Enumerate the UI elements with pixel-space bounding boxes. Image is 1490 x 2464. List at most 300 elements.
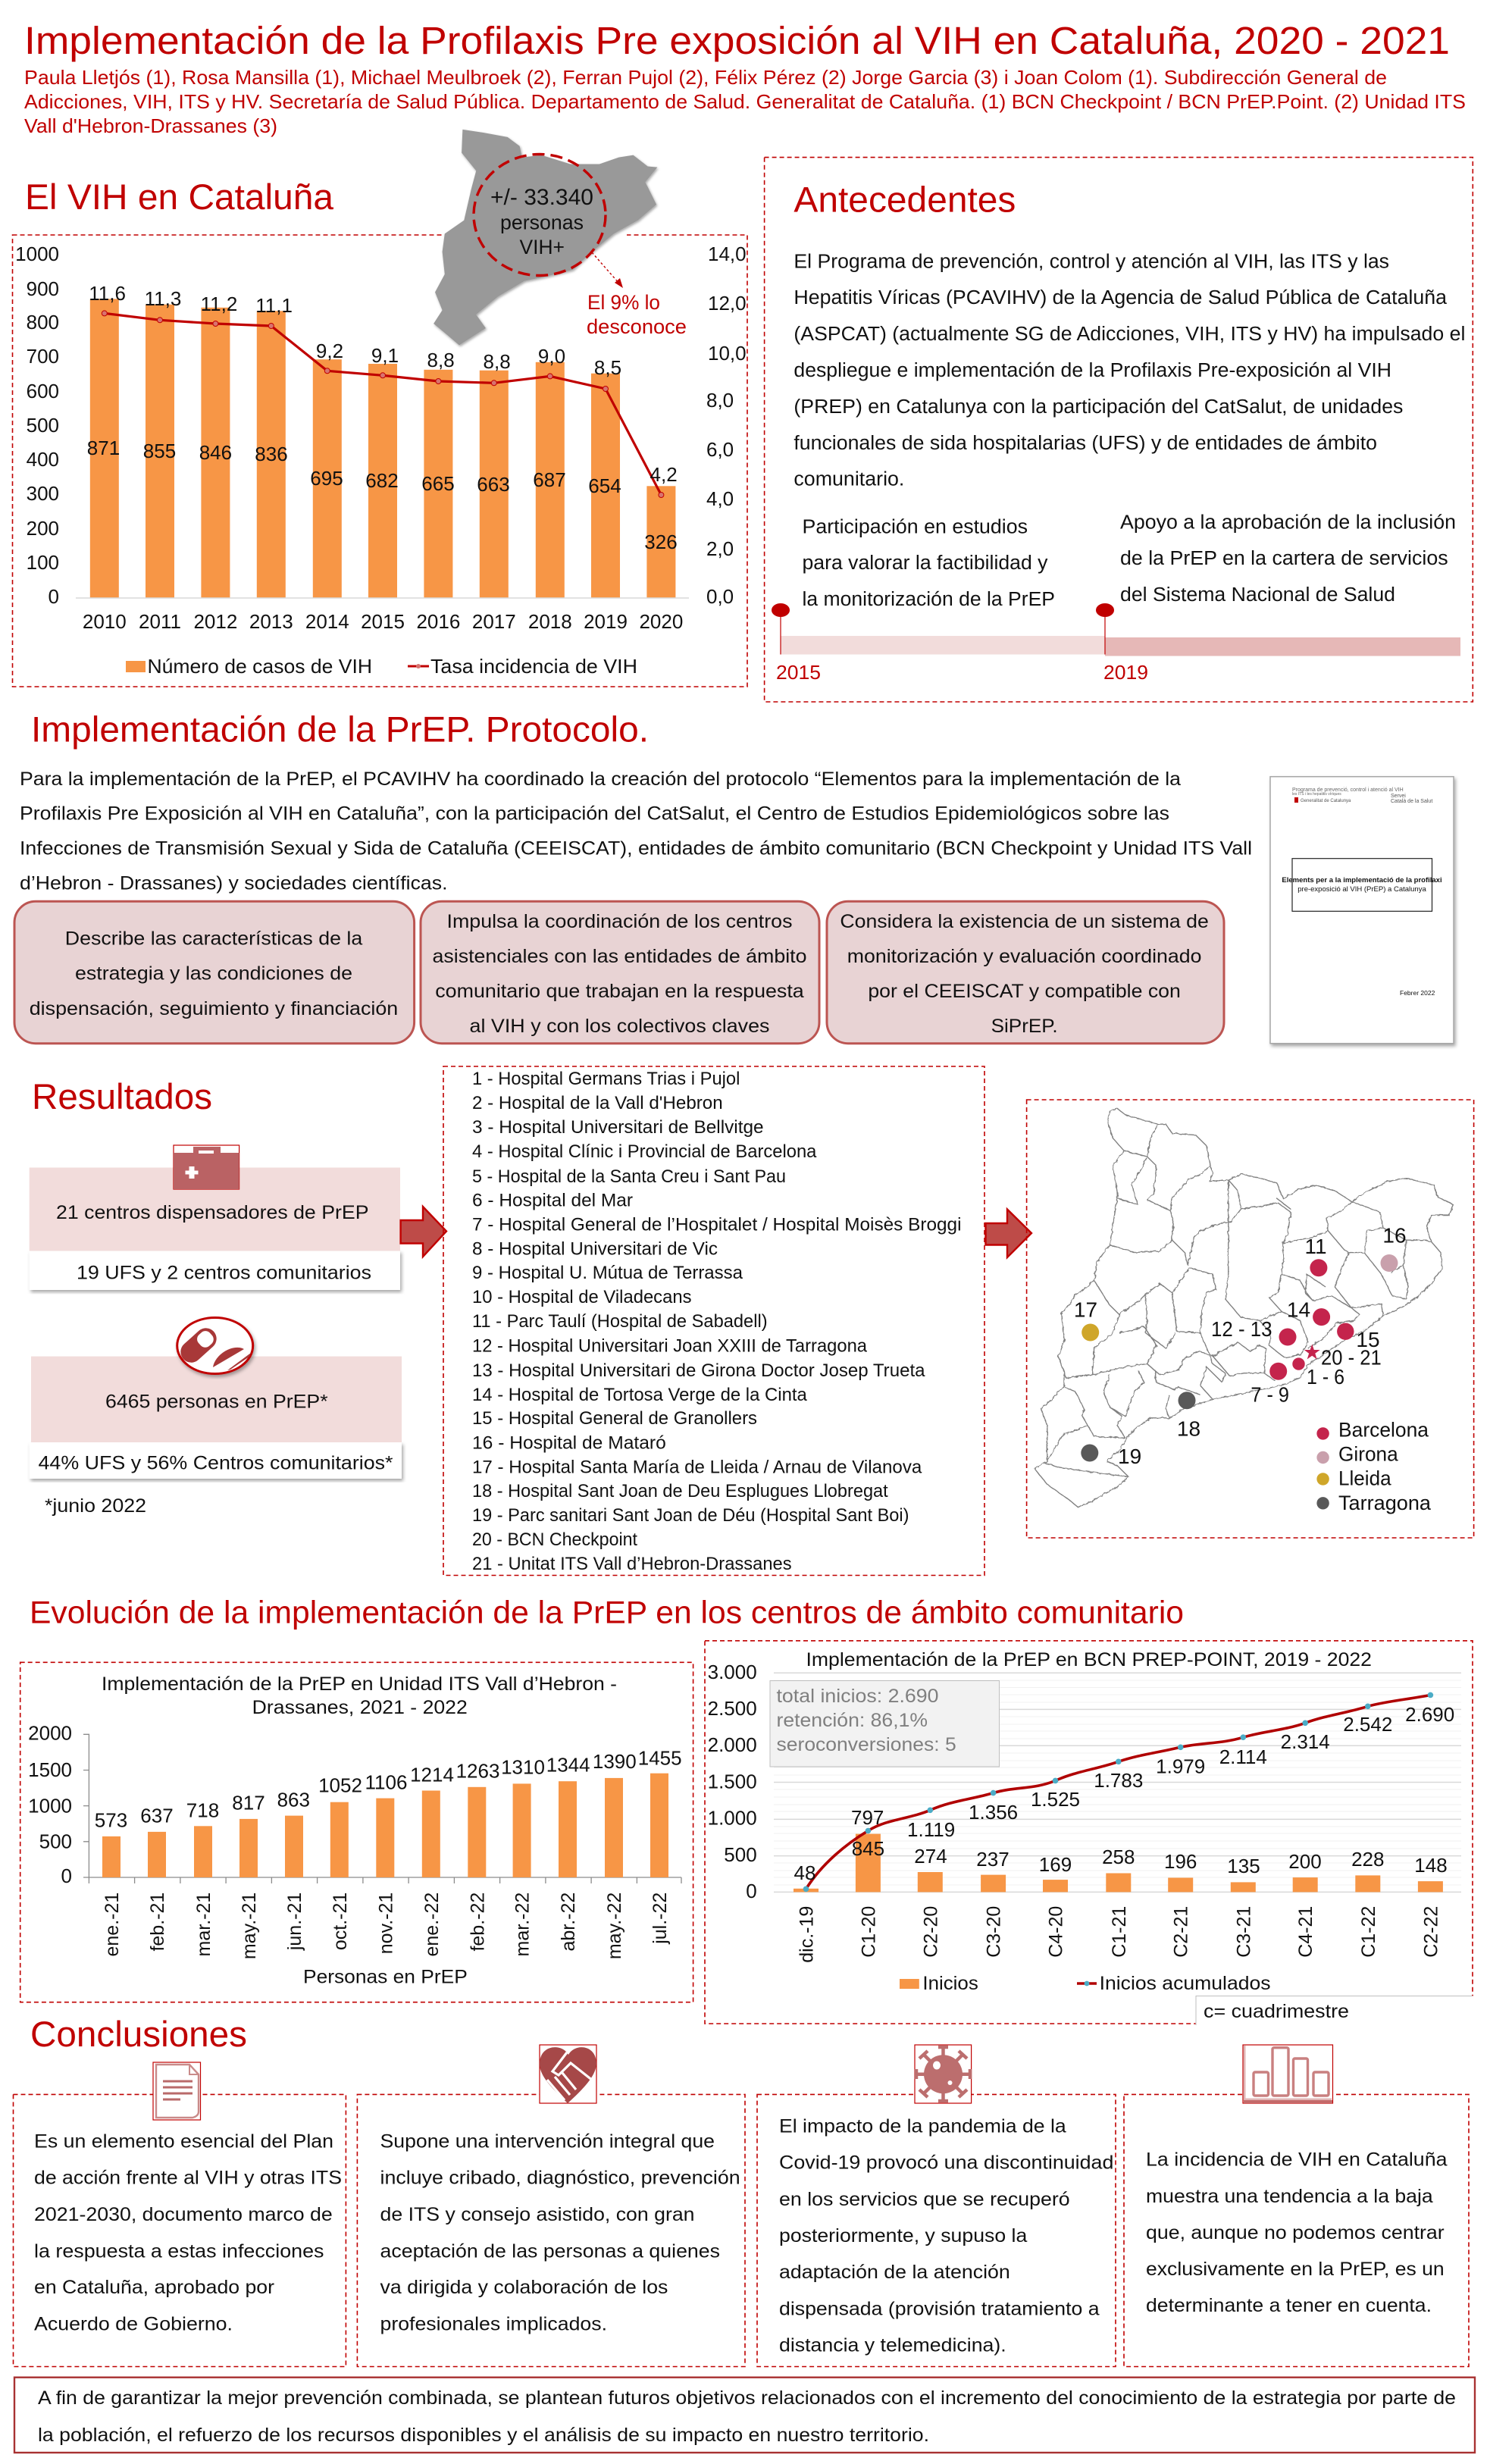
panel: conclusion 4: determinante a tener en cuenta. xyxy=(1146,2295,1432,2316)
panel: conclusion 4 xyxy=(1124,2094,1469,2366)
panel: hospital list: 4 - Hospital Clínic i Provincial de Barcelona xyxy=(472,1141,817,1162)
left axis labels: 1000 xyxy=(15,243,59,265)
y labels xyxy=(708,1661,757,1902)
y labels: 0 xyxy=(61,1864,72,1887)
panel: conclusion 1: la respuesta a estas infecciones xyxy=(34,2241,324,2262)
cumulative labels xyxy=(852,1703,1454,1860)
cumulative labels: 2.114 xyxy=(1219,1745,1267,1768)
left axis labels: 600 xyxy=(27,380,59,402)
period labels: C4-20 xyxy=(1046,1906,1067,1958)
panel: hospital list: 12 - Hospital Universitari Joan XXIII de Tarragona xyxy=(472,1335,868,1357)
cumulative labels: 2.690 xyxy=(1405,1703,1454,1726)
map number labels: 12 - 13 xyxy=(1211,1317,1272,1341)
bar labels: 48 xyxy=(794,1861,815,1884)
closing statement: A fin de garantizar la mejor prevención combinada, se plantean futuros objetivos relacionados con el incremento del conocimiento de la estrategia por parte de xyxy=(38,2387,1456,2409)
panel: conclusion 3: adaptación de la atención xyxy=(779,2262,1010,2283)
line value labels xyxy=(89,282,678,486)
panel: hospital list: 17 - Hospital Santa María de Lleida / Arnau de Vilanova xyxy=(472,1457,922,1478)
bar value labels: 665 xyxy=(421,472,455,495)
timeline text 2015: la monitorización de la PrEP xyxy=(802,589,1055,610)
box: strategy characteristics: dispensación, seguimiento y financiación xyxy=(30,998,398,1019)
panel: conclusion 2: Supone una intervención integral que xyxy=(380,2131,715,2152)
panel: conclusion 3: Covid-19 provocó una discontinuidad xyxy=(779,2152,1113,2174)
month labels: ene.-22 xyxy=(421,1893,443,1956)
heading: Resultados: Resultados xyxy=(32,1077,212,1117)
arrow to map xyxy=(985,1210,1031,1257)
month labels: jul.-22 xyxy=(650,1893,671,1945)
map: Catalonia silhouette with prevalence circle: VIH+ xyxy=(520,236,565,258)
panel: hospital list: 14 - Hospital de Tortosa Verge de la Cinta xyxy=(472,1385,807,1405)
bar labels: 148 xyxy=(1414,1854,1448,1877)
timeline: 2015 xyxy=(776,661,821,684)
authors: Adicciones, VIH, ITS y HV. Secretaría de Salud Pública. Departamento de Salud. Generalitat de Cataluña. (1) BCN Checkpoint / BCN PrEP.Point. (2) Unidad ITS xyxy=(24,90,1466,113)
authors: Paula Lletjós (1), Rosa Mansilla (1), Michael Meulbroek (2), Ferran Pujol (2), Félix Pérez (2) Jorge Garcia (3) i Joan Colom (1). Subdirección General de xyxy=(24,66,1387,89)
year labels: 2018 xyxy=(528,610,572,633)
right axis labels: 4,0 xyxy=(706,487,734,510)
bars xyxy=(90,299,675,598)
protocol paragraph: Infecciones de Transmisión Sexual y Sida de Cataluña (CEEISCAT), entidades de ámbito comunitario (BCN Checkpoint y Unidad ITS Vall xyxy=(20,838,1252,859)
box: coordination: comunitario que trabajan en la respuesta xyxy=(435,981,804,1002)
line value labels: 9,1 xyxy=(371,344,399,367)
bar value labels: 654 xyxy=(588,474,621,497)
map: Catalonia silhouette with prevalence circle: +/- 33.340 xyxy=(490,185,593,210)
period labels: C1-22 xyxy=(1358,1906,1379,1958)
timeline text 2019: Apoyo a la aprobación de la inclusión xyxy=(1120,512,1456,534)
background text: despliegue e implementación de la Profilaxis Pre-exposición al VIH xyxy=(794,360,1391,381)
month labels: abr.-22 xyxy=(558,1893,579,1952)
document cover thumbnail: Generalitat de Catalunya xyxy=(1301,799,1351,803)
map number labels: 14 xyxy=(1287,1298,1310,1322)
callout: 9% unaware: desconoce xyxy=(587,315,687,338)
y labels: 1.000 xyxy=(708,1807,757,1830)
panel: hospital list: 3 - Hospital Universitari de Bellvitge xyxy=(472,1117,764,1138)
panel: hospital map xyxy=(1027,1100,1474,1538)
bar labels: 237 xyxy=(976,1848,1010,1871)
month labels: feb.-21 xyxy=(147,1893,168,1952)
bars xyxy=(794,1834,1443,1892)
info box: retención: 86,1% xyxy=(776,1710,928,1731)
protocol paragraph: Para la implementación de la PrEP, el PCAVIHV ha coordinado la creación del protocolo “Elementos para la implementación de la xyxy=(20,769,1181,790)
y labels: 2.000 xyxy=(708,1733,757,1756)
year labels: 2010 xyxy=(83,610,127,633)
authors: Vall d'Hebron-Drassanes (3) xyxy=(24,114,277,137)
map: comarques outline xyxy=(1035,1109,1453,1508)
authors xyxy=(24,66,1466,137)
background text: El Programa de prevención, control y atención al VIH, las ITS y las xyxy=(794,252,1389,273)
timeline text 2015 xyxy=(802,517,1055,610)
background text: (PREP) en Catalunya con la participación del CatSalut, de unidades xyxy=(794,396,1403,418)
panel: conclusion 2: profesionales implicados. xyxy=(380,2313,607,2334)
panel: Antecedentes xyxy=(765,158,1473,702)
y labels xyxy=(28,1722,72,1887)
map number labels: 15 xyxy=(1356,1328,1380,1351)
map number labels xyxy=(1074,1224,1407,1468)
y labels: 500 xyxy=(39,1830,72,1852)
background text: funcionales de sida hospitalarias (UFS) y de entidades de ámbito xyxy=(794,433,1377,454)
value labels: 637 xyxy=(140,1805,174,1827)
panel: conclusion 1: en Cataluña, aprobado por xyxy=(34,2277,274,2298)
bar value labels xyxy=(87,437,678,553)
period labels: C2-22 xyxy=(1420,1906,1441,1958)
document cover thumbnail: Servei xyxy=(1391,794,1406,799)
map: Catalonia silhouette with prevalence circle: personas xyxy=(500,211,584,233)
year labels: 2013 xyxy=(249,610,293,633)
chart legend: Inicios acumulados xyxy=(1100,1973,1271,1994)
period labels: dic.-19 xyxy=(796,1906,817,1963)
incidence line xyxy=(102,311,664,497)
y labels: 2.500 xyxy=(708,1697,757,1720)
y labels: 1500 xyxy=(28,1758,72,1781)
bar labels: 274 xyxy=(914,1845,947,1868)
protocol paragraph xyxy=(20,769,1252,894)
panel: conclusion 2: incluye cribado, diagnóstico, prevención xyxy=(380,2168,740,2189)
panel: hospital list: 21 - Unitat ITS Vall d’Hebron-Drassanes xyxy=(472,1554,792,1574)
y labels: 3.000 xyxy=(708,1661,757,1683)
panel: hospital list: 5 - Hospital de la Santa Creu i Sant Pau xyxy=(472,1166,786,1187)
panel: hospital list: 15 - Hospital General de Granollers xyxy=(472,1408,757,1429)
panel: hospital list: 18 - Hospital Sant Joan de Deu Esplugues Llobregat xyxy=(472,1481,888,1501)
map legend: Lleida xyxy=(1338,1467,1391,1490)
line value labels: 9,2 xyxy=(316,340,343,362)
line value labels: 11,1 xyxy=(255,294,293,317)
box: coordination: Impulsa la coordinación de los centros xyxy=(447,911,793,932)
month labels: nov.-21 xyxy=(375,1893,396,1954)
document cover thumbnail: Català de la Salut xyxy=(1391,799,1432,804)
box: strategy characteristics: estrategia y las condiciones de xyxy=(75,963,352,985)
value labels: 718 xyxy=(186,1799,219,1821)
panel: conclusion 3 xyxy=(757,2094,1116,2366)
right axis labels: 8,0 xyxy=(706,389,734,412)
panel: hospital list: 2 - Hospital de la Vall d'Hebron xyxy=(472,1093,723,1113)
closing statement: la población, el refuerzo de los recursos disponibles y el análisis de su impacto en nuestro territorio. xyxy=(38,2425,929,2446)
period labels: C1-21 xyxy=(1109,1906,1130,1958)
chart title: Drassanes, 2021 - 2022 xyxy=(252,1697,468,1718)
panel: conclusion 2 xyxy=(357,2094,745,2366)
left axis labels: 700 xyxy=(27,345,59,368)
period labels xyxy=(796,1906,1441,1963)
month labels: mar.-21 xyxy=(193,1893,214,1956)
y labels: 0 xyxy=(746,1880,757,1902)
timeline text 2015: Participación en estudios xyxy=(802,517,1028,538)
left axis labels: 900 xyxy=(27,277,59,300)
chart title: Implementación de la PrEP en BCN PREP-POINT, 2019 - 2022 xyxy=(806,1649,1372,1670)
panel: hospital list xyxy=(443,1066,984,1575)
panel: conclusion 3: en los servicios que se recuperó xyxy=(779,2189,1070,2210)
year labels: 2014 xyxy=(305,610,349,633)
heading: El VIH en Cataluña: El VIH en Cataluña xyxy=(25,177,334,218)
month labels: oct.-21 xyxy=(330,1893,351,1950)
value labels xyxy=(95,1746,682,1832)
month labels xyxy=(102,1893,671,1959)
chart title xyxy=(102,1673,617,1718)
gridlines xyxy=(774,1680,1461,1885)
map number labels: 16 xyxy=(1382,1224,1407,1248)
right axis labels: 6,0 xyxy=(706,438,734,461)
panel: conclusion 1: 2021-2030, documento marco de xyxy=(34,2204,333,2225)
arrow: dotted to unaware share xyxy=(592,252,623,288)
box: monitoring: por el CEEISCAT y compatible con xyxy=(868,981,1181,1002)
card: 6465 people xyxy=(30,1357,402,1479)
left axis labels: 100 xyxy=(27,551,59,574)
cumulative labels: 1.356 xyxy=(969,1801,1018,1824)
bar value labels: 682 xyxy=(365,469,399,492)
left axis labels xyxy=(15,243,59,608)
axis title: Personas en PrEP xyxy=(303,1967,468,1988)
bar labels: 797 xyxy=(851,1806,884,1829)
bar labels: 200 xyxy=(1288,1850,1322,1873)
value labels: 1263 xyxy=(456,1760,499,1783)
timeline text 2019: del Sistema Nacional de Salud xyxy=(1120,584,1395,606)
callout: 9% unaware: El 9% lo xyxy=(587,291,660,314)
map number labels: 17 xyxy=(1074,1298,1097,1322)
bar value labels: 836 xyxy=(255,443,288,465)
year labels: 2011 xyxy=(139,610,181,633)
line value labels: 4,2 xyxy=(650,463,678,486)
info box: seroconversiones: 5 xyxy=(776,1734,956,1755)
bar value labels: 687 xyxy=(533,468,566,491)
left axis labels: 500 xyxy=(27,414,59,437)
bar labels: 169 xyxy=(1039,1853,1072,1876)
left axis labels: 200 xyxy=(27,517,59,540)
value labels: 1052 xyxy=(318,1774,362,1797)
panel: hospital list: 13 - Hospital Universitari de Girona Doctor Josep Trueta xyxy=(472,1360,925,1381)
bar value labels: 326 xyxy=(644,531,678,553)
year labels: 2012 xyxy=(193,610,237,633)
year labels: 2016 xyxy=(416,610,460,633)
bars xyxy=(102,1774,668,1877)
right axis labels: 14,0 xyxy=(708,243,747,265)
month labels: may.-21 xyxy=(239,1893,260,1959)
panel: conclusion 4: exclusivamente en la PrEP, es un xyxy=(1146,2259,1445,2280)
line value labels: 11,3 xyxy=(145,287,181,310)
cumulative line xyxy=(803,1692,1433,1892)
panel: hospital list: 10 - Hospital de Viladecans xyxy=(472,1287,691,1307)
timeline text 2019 xyxy=(1120,512,1456,606)
period labels: C1-20 xyxy=(858,1906,879,1958)
right axis labels: 10,0 xyxy=(708,342,747,365)
value labels: 1455 xyxy=(638,1746,682,1769)
background text: (ASPCAT) (actualmente SG de Adicciones, VIH, ITS y HV) ha impulsado el xyxy=(794,324,1465,345)
left axis labels: 400 xyxy=(27,448,59,471)
month labels: feb.-22 xyxy=(467,1893,488,1952)
panel: conclusion 1 xyxy=(14,2094,346,2366)
info box: total inicios: 2.690 xyxy=(776,1686,938,1707)
panel: hospital list: 7 - Hospital General de l’Hospitalet / Hospital Moisès Broggi xyxy=(472,1214,961,1235)
value labels: 1214 xyxy=(410,1763,454,1786)
panel: conclusion 4: que, aunque no podemos centrar xyxy=(1146,2222,1445,2243)
box: monitoring: monitorización y evaluación coordinado xyxy=(847,946,1201,967)
right axis labels: 12,0 xyxy=(708,292,747,315)
map legend: Tarragona xyxy=(1338,1492,1431,1514)
background text: comunitario. xyxy=(794,468,904,490)
y labels: 1.500 xyxy=(708,1770,757,1792)
document cover thumbnail: Elements per a la implementació de la profilaxi xyxy=(1282,876,1442,884)
icon: pills xyxy=(177,1317,253,1373)
icon: document xyxy=(153,2062,200,2120)
cuadrimestre note xyxy=(1196,1996,1473,2025)
value labels: 1390 xyxy=(593,1750,637,1773)
timeline: 2019 xyxy=(1103,661,1148,684)
value labels: 1344 xyxy=(546,1753,590,1776)
value labels: 573 xyxy=(95,1809,127,1832)
chart legend xyxy=(900,1973,1271,1994)
panel: conclusion 3: posteriormente, y supuso la xyxy=(779,2225,1027,2246)
hospital markers xyxy=(1081,1254,1398,1461)
line value labels: 8,8 xyxy=(427,349,455,371)
document cover thumbnail: les ITS i les hepatitis víriques xyxy=(1292,792,1341,797)
y labels: 500 xyxy=(724,1843,757,1866)
map number labels: 18 xyxy=(1177,1417,1200,1441)
bar labels: 228 xyxy=(1351,1848,1384,1871)
box: monitoring xyxy=(827,901,1224,1044)
card: 6465 people: 6465 personas en PrEP* xyxy=(105,1392,328,1413)
map: Catalonia silhouette with prevalence circle xyxy=(434,130,657,346)
bar value labels: 695 xyxy=(310,467,343,490)
month labels: mar.-22 xyxy=(512,1893,534,1956)
background text xyxy=(794,252,1465,490)
panel: BCN PrEP-Point chart xyxy=(705,1641,1473,2025)
panel: conclusion 1: de acción frente al VIH y otras ITS xyxy=(34,2168,342,2189)
value labels: 817 xyxy=(232,1791,265,1814)
period labels: C3-20 xyxy=(984,1906,1005,1958)
panel: conclusion 3: distancia y telemedicina). xyxy=(779,2334,1006,2356)
bar value labels: 855 xyxy=(143,440,176,462)
panel: conclusion 4: La incidencia de VIH en Cataluña xyxy=(1146,2149,1448,2171)
right axis labels: 0,0 xyxy=(706,585,734,608)
value labels: 863 xyxy=(277,1789,310,1811)
year labels: 2015 xyxy=(361,610,405,633)
y labels: 1000 xyxy=(28,1794,72,1817)
map legend xyxy=(1316,1418,1431,1514)
box: monitoring: SiPrEP. xyxy=(991,1016,1058,1037)
box: coordination: al VIH y con los colectivos claves xyxy=(470,1016,770,1037)
period labels: C4-21 xyxy=(1295,1906,1316,1958)
panel: hospital list: 16 - Hospital de Mataró xyxy=(472,1432,666,1453)
bar value labels: 871 xyxy=(87,437,120,459)
timeline text 2019: de la PrEP en la cartera de servicios xyxy=(1120,548,1448,569)
bar labels: 135 xyxy=(1227,1855,1260,1877)
line value labels: 9,0 xyxy=(538,345,565,368)
bar value labels: 663 xyxy=(477,473,510,496)
icon: bar chart xyxy=(1243,2045,1332,2103)
map number labels: 20 - 21 xyxy=(1321,1345,1382,1369)
panel: hospital list: 1 - Hospital Germans Trias i Pujol xyxy=(472,1069,740,1089)
year labels: 2019 xyxy=(584,610,628,633)
panel: conclusion 2: va dirigida y colaboración de los xyxy=(380,2277,668,2298)
heading: Antecedentes: Antecedentes xyxy=(794,180,1016,220)
info box xyxy=(770,1681,999,1767)
cumulative labels: 2.314 xyxy=(1281,1730,1330,1753)
bar value labels: 846 xyxy=(199,441,232,464)
document cover thumbnail xyxy=(1270,777,1454,1044)
bar labels xyxy=(794,1806,1448,1884)
panel: Vall d'Hebron chart xyxy=(20,1662,693,2002)
timeline text 2015: para valorar la factibilidad y xyxy=(802,553,1048,574)
chart legend: Inicios xyxy=(922,1973,978,1994)
icon: medical briefcase xyxy=(174,1145,239,1189)
cumulative labels: 2.542 xyxy=(1343,1713,1392,1736)
value labels: 1106 xyxy=(365,1771,407,1793)
period labels: C3-21 xyxy=(1233,1906,1254,1958)
month labels: jun.-21 xyxy=(284,1893,305,1951)
chart legend: Tasa incidencia de VIH xyxy=(430,655,637,678)
box: coordination: asistenciales con las entidades de ámbito xyxy=(432,946,806,967)
cuadrimestre note: c= cuadrimestre xyxy=(1204,2001,1349,2022)
axes xyxy=(83,1734,681,1883)
icon: handshake xyxy=(540,2045,596,2103)
heading: Protocolo: Implementación de la PrEP. Protocolo. xyxy=(31,709,649,750)
month labels: ene.-21 xyxy=(102,1893,123,1956)
map legend: Girona xyxy=(1338,1442,1398,1465)
panel: hospital list: 20 - BCN Checkpoint xyxy=(472,1529,637,1550)
year labels: 2017 xyxy=(472,610,516,633)
panel: HIV chart xyxy=(12,235,747,687)
cumulative labels: 1.783 xyxy=(1094,1769,1143,1792)
right axis labels: 2,0 xyxy=(706,537,734,560)
icon: virus xyxy=(915,2045,972,2103)
box: monitoring: Considera la existencia de un sistema de xyxy=(840,911,1209,932)
protocol paragraph: d’Hebron - Drassanes) y sociedades científicas. xyxy=(20,873,447,894)
y labels: 2000 xyxy=(28,1722,72,1745)
panel: hospital list: 6 - Hospital del Mar xyxy=(472,1190,633,1210)
document cover thumbnail: Febrer 2022 xyxy=(1400,989,1435,997)
box: strategy characteristics: Describe las características de la xyxy=(65,928,362,950)
document cover thumbnail: pre-exposició al VIH (PrEP) a Catalunya xyxy=(1297,885,1426,894)
card: 6465 people: 44% UFS y 56% Centros comunitarios* xyxy=(38,1453,393,1474)
box: strategy characteristics xyxy=(14,901,415,1044)
month labels: may.-22 xyxy=(604,1893,625,1959)
map number labels: 7 - 9 xyxy=(1251,1382,1289,1406)
panel: hospital list: 8 - Hospital Universitari de Vic xyxy=(472,1239,718,1260)
left axis labels: 300 xyxy=(27,482,59,505)
panel: conclusion 3: dispensada (provisión tratamiento a xyxy=(779,2298,1100,2319)
cumulative labels: 845 xyxy=(852,1837,884,1860)
panel: conclusion 2: aceptación de las personas a quienes xyxy=(380,2241,720,2262)
timeline xyxy=(772,603,1460,684)
chart legend xyxy=(126,655,637,678)
heading: Evolución: Evolución de la implementación de la PrEP en los centros de ámbito comunitario xyxy=(30,1595,1184,1630)
line value labels: 8,8 xyxy=(484,350,511,373)
title: Implementación de la Profilaxis Pre exposición al VIH en Cataluña, 2020 - 2021 xyxy=(24,19,1450,62)
value labels: 1310 xyxy=(501,1756,545,1779)
arrow to hospital list xyxy=(401,1207,446,1257)
map number labels: 19 xyxy=(1118,1445,1141,1468)
callout: 9% unaware xyxy=(587,291,687,338)
map legend: Barcelona xyxy=(1338,1418,1429,1441)
heading: Conclusiones: Conclusiones xyxy=(30,2015,247,2055)
line value labels: 11,6 xyxy=(89,282,126,305)
line value labels: 11,2 xyxy=(201,293,237,315)
card: 21 centers: 21 centros dispensadores de PrEP xyxy=(56,1202,369,1223)
protocol paragraph: Profilaxis Pre Exposición al VIH en Cataluña”, con la participación del CatSalut, el Centro de Estudios Epidemiológicos sobre las xyxy=(20,803,1169,825)
year labels xyxy=(83,610,683,633)
period labels: C2-21 xyxy=(1171,1906,1192,1958)
card: 21 centers: 19 UFS y 2 centros comunitarios xyxy=(77,1263,371,1284)
panel: conclusion 4: muestra una tendencia a la baja xyxy=(1146,2186,1433,2207)
panel: hospital list: 19 - Parc sanitari Sant Joan de Déu (Hospital Sant Boi) xyxy=(472,1505,909,1526)
cumulative labels: 1.979 xyxy=(1156,1755,1205,1778)
box: coordination xyxy=(421,901,819,1044)
cumulative labels: 1.119 xyxy=(907,1818,955,1841)
document cover thumbnail: Programa de prevenció, control i atenció al VIH xyxy=(1292,787,1404,793)
period labels: C2-20 xyxy=(920,1906,941,1958)
white gap in panel border behind map xyxy=(443,231,627,239)
panel: hospital list: 9 - Hospital U. Mútua de Terrassa xyxy=(472,1263,743,1283)
line value labels: 8,5 xyxy=(594,356,621,379)
cumulative labels: 1.525 xyxy=(1031,1788,1080,1811)
panel: conclusion 3: El impacto de la pandemia de la xyxy=(779,2116,1066,2137)
background text: Hepatitis Víricas (PCAVIHV) de la Agencia de Salud Pública de Cataluña xyxy=(794,287,1448,308)
